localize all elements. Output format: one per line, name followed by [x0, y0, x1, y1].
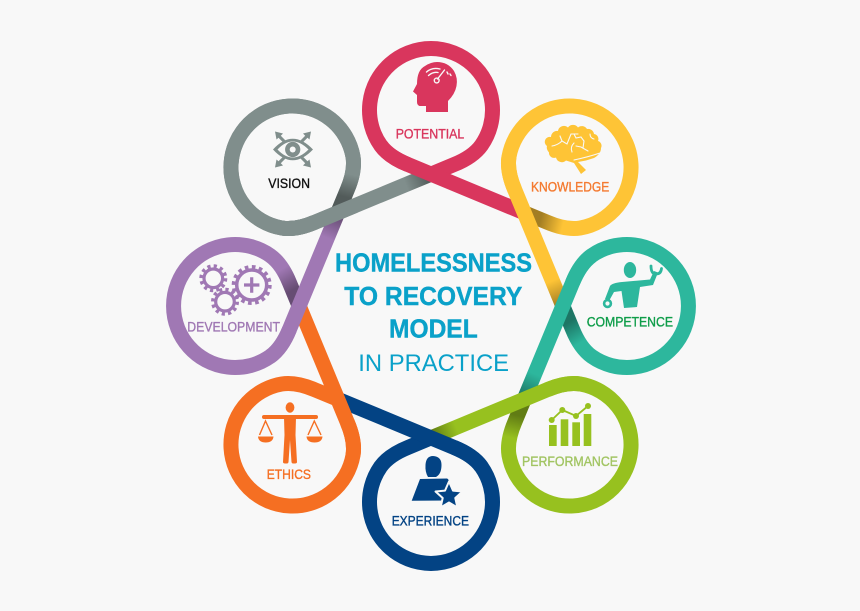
icon: brain	[545, 125, 602, 174]
panel: development	[174, 212, 338, 367]
title: TO RECOVERY	[344, 283, 522, 311]
ribbon: vision (lower layer with tail)	[205, 57, 432, 284]
ribbon: ethics	[182, 305, 409, 532]
title: MODEL	[389, 316, 478, 344]
icon: gears	[201, 266, 270, 314]
ribbon: experience	[337, 399, 492, 563]
icon: eye with arrows	[273, 132, 313, 168]
label: performance: PERFORMANCE	[522, 454, 618, 469]
panel: competence	[524, 245, 688, 400]
title: HOMELESSNESS	[335, 250, 532, 278]
ribbon: competence	[524, 245, 688, 400]
icon: head with gauge	[413, 62, 457, 112]
label: experience: EXPERIENCE	[392, 514, 469, 529]
ribbon: performance	[430, 328, 657, 555]
panel: performance	[430, 328, 657, 555]
title	[335, 250, 532, 377]
panel: knowledge	[453, 80, 680, 307]
icon: person with star	[412, 456, 462, 508]
label: vision: VISION	[268, 176, 310, 191]
label: development: DEVELOPMENT	[187, 320, 280, 335]
icon: worker with wrench	[604, 262, 662, 308]
label: competence: COMPETENCE	[587, 315, 673, 330]
ribbon: vision (top layer over development tail)	[205, 80, 386, 261]
title: IN PRACTICE	[358, 350, 509, 377]
panel: potential	[370, 49, 525, 213]
ribbon: development	[174, 212, 338, 367]
panel: vision	[205, 80, 386, 261]
panel: experience	[337, 399, 492, 563]
ribbon: knowledge	[453, 80, 680, 307]
ribbon: potential	[370, 49, 525, 213]
label: knowledge: KNOWLEDGE	[531, 179, 609, 194]
label: potential: POTENTIAL	[396, 127, 464, 142]
label: ethics: ETHICS	[267, 467, 311, 482]
panel: ethics	[182, 305, 409, 532]
icon: bar chart with trend line	[549, 403, 591, 446]
icon: person holding scales	[258, 402, 322, 464]
